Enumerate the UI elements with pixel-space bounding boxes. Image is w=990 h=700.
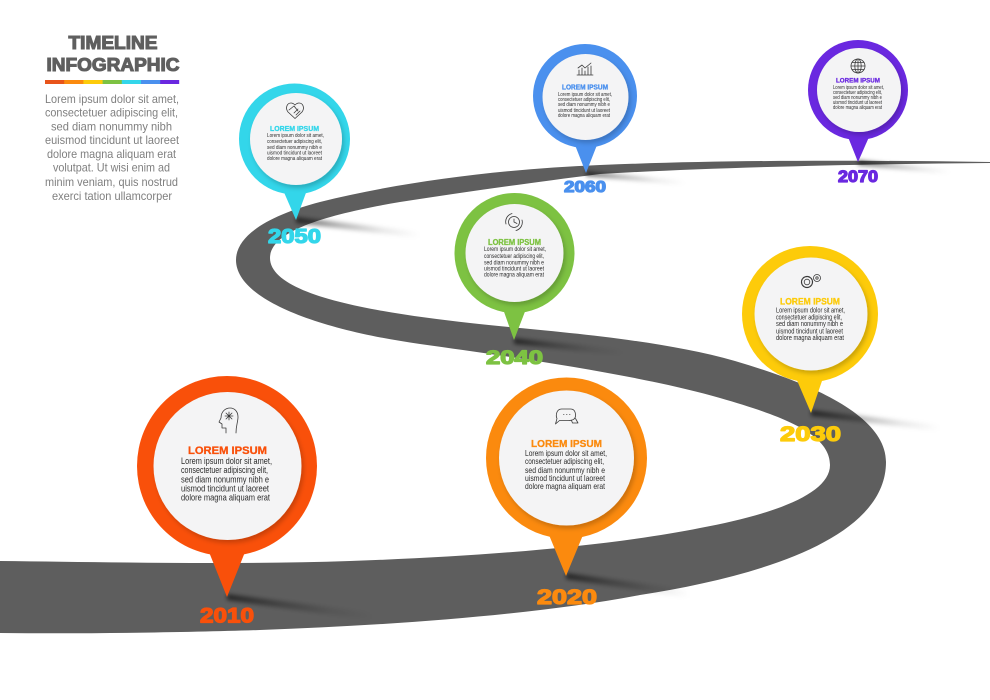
body text: Lorem ipsum dolor sit amet, [525, 449, 607, 458]
body text: sed diam nonummy nibh e [833, 95, 882, 101]
pin disc [466, 204, 564, 302]
intro text: dolore magna aliquam erat [47, 147, 177, 161]
icon: globe [851, 59, 865, 73]
intro text: volutpat. Ut wisi enim ad [53, 160, 170, 174]
intro text: sed diam nonummy nibh [51, 120, 172, 134]
pin disc [754, 258, 868, 370]
body text: sed diam nonummy nibh e [776, 321, 843, 328]
body text: dolore magna aliquam erat [267, 156, 322, 162]
body text [484, 246, 546, 278]
body text [776, 308, 845, 342]
year: 2060 [564, 179, 606, 196]
pin: 2050 [239, 84, 350, 248]
body text: consectetuer adipiscing elit, [525, 457, 604, 466]
icon: clock with arrows [506, 214, 522, 230]
body text: sed diam nonummy nibh e [525, 466, 605, 475]
rainbow divider [45, 80, 179, 84]
body text: dolore magna aliquam erat [558, 113, 610, 119]
icon: handshake heart [287, 103, 303, 118]
pin: 2020 [486, 378, 647, 609]
body text: Lorem ipsum dolor sit amet, [558, 92, 612, 98]
body text: uismod tincidunt ut laoreet [833, 100, 883, 106]
pin: 2030 [742, 246, 878, 446]
label: LOREM IPSUM [188, 445, 267, 457]
body text: consectetuer adipiscing elit, [833, 90, 882, 96]
body text: uismod tincidunt ut laoreet [181, 483, 269, 493]
label: LOREM IPSUM [836, 78, 880, 84]
icon: head [219, 408, 238, 433]
pin: 2070 [808, 40, 908, 186]
body text: dolore magna aliquam erat [525, 482, 606, 491]
year: 2030 [780, 423, 841, 446]
body text: Lorem ipsum dolor sit amet, [484, 246, 546, 253]
pin body [808, 40, 908, 162]
body text: consectetuer adipiscing elit, [267, 139, 322, 145]
year: 2050 [268, 226, 321, 248]
intro text: minim veniam, quis nostrud [45, 175, 178, 189]
body text [833, 85, 884, 111]
body text: uismod tincidunt ut laoreet [776, 328, 843, 336]
body text: sed diam nonummy nibh e [267, 145, 322, 151]
label: LOREM IPSUM [562, 84, 608, 92]
body text: Lorem ipsum dolor sit amet, [267, 133, 324, 139]
intro text: euismod tincidunt ut laoreet [45, 133, 180, 147]
year: 2010 [200, 604, 254, 628]
heading: TIMELINE [68, 33, 158, 53]
body text: dolore magna aliquam erat [776, 335, 844, 342]
body text: consectetuer adipiscing elit, [181, 465, 268, 475]
body text: uismod tincidunt ut laoreet [484, 266, 544, 272]
pin: 2010 [137, 376, 317, 628]
intro text: Lorem ipsum dolor sit amet, [45, 92, 179, 106]
heading: INFOGRAPHIC [46, 55, 180, 75]
pin body [239, 84, 350, 220]
intro text [45, 92, 180, 203]
icon: gears [802, 274, 820, 288]
body text [181, 456, 272, 502]
year: 2020 [537, 586, 597, 609]
pin: 2040 [454, 193, 574, 369]
body text: consectetuer adipiscing elit, [558, 97, 610, 103]
body text: consectetuer adipiscing elit, [484, 253, 544, 260]
body text: dolore magna aliquam erat [484, 272, 544, 278]
icon: speech bubbles [556, 409, 578, 424]
label: LOREM IPSUM [531, 439, 602, 450]
heading [46, 33, 180, 75]
body text: sed diam nonummy nibh e [558, 102, 610, 108]
pin disc [154, 392, 302, 540]
pin disc [542, 54, 628, 140]
year: 2040 [486, 348, 543, 369]
title block [45, 33, 180, 203]
pin body [742, 246, 878, 413]
pin: 2060 [533, 44, 637, 196]
intro text: consectetuer adipiscing elit, [45, 106, 178, 120]
pin disc [499, 390, 634, 526]
intro text: exerci tation ullamcorper [52, 189, 172, 203]
pin body [533, 44, 637, 173]
body text: dolore magna aliquam erat [833, 105, 882, 111]
body text: consectetuer adipiscing elit, [776, 314, 842, 322]
icon: bar chart [577, 63, 593, 75]
pin disc [250, 93, 342, 185]
body text [525, 449, 607, 491]
body text: sed diam nonummy nibh e [181, 474, 269, 484]
winding road [0, 161, 990, 633]
body text [558, 92, 612, 119]
body text: Lorem ipsum dolor sit amet, [181, 456, 272, 466]
body text: Lorem ipsum dolor sit amet, [776, 308, 845, 314]
label: LOREM IPSUM [780, 296, 840, 306]
body text: uismod tincidunt ut laoreet [267, 150, 322, 156]
body text: dolore magna aliquam erat [181, 492, 270, 502]
body text: sed diam nonummy nibh e [484, 260, 545, 266]
year: 2070 [838, 168, 878, 186]
pin body [486, 378, 647, 576]
pin body [454, 193, 574, 340]
pin ground shadows [227, 160, 950, 621]
label: LOREM IPSUM [488, 238, 541, 247]
body text: Lorem ipsum dolor sit amet, [833, 85, 884, 91]
label: LOREM IPSUM [270, 124, 319, 133]
pin body [137, 376, 317, 597]
pin disc [817, 48, 901, 132]
body text [267, 133, 324, 162]
body text: uismod tincidunt ut laoreet [525, 474, 606, 483]
body text: uismod tincidunt ut laoreet [558, 108, 610, 114]
